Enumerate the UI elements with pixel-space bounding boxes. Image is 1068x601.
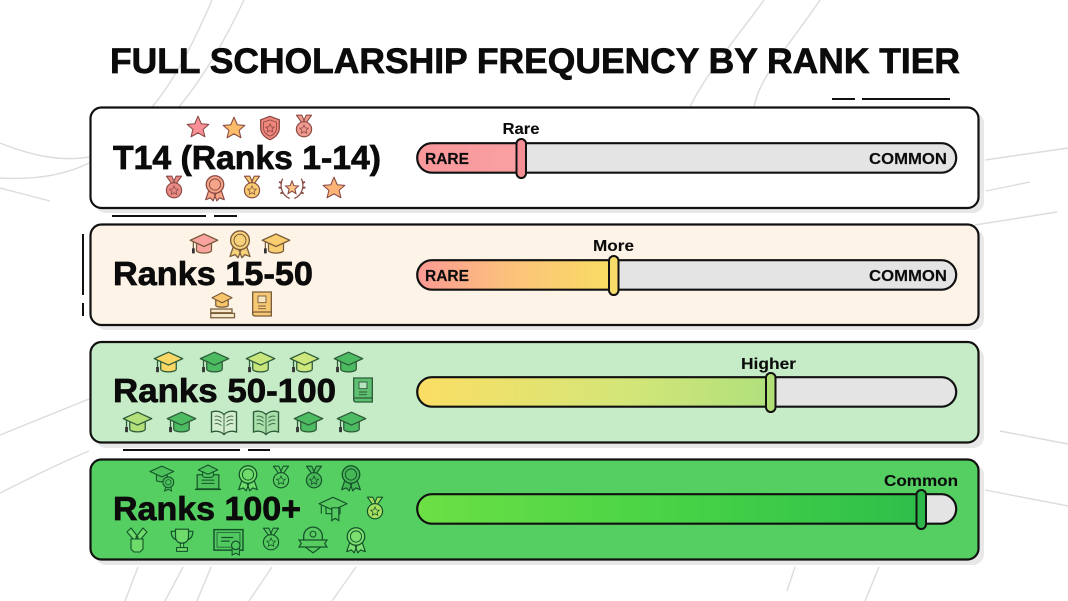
panel: Ranks 50-100 <box>90 342 984 448</box>
icons: Ranks 15-50 academics <box>190 231 290 318</box>
slider: Rare: Rare <box>502 121 540 138</box>
panel: T14 <box>90 108 984 213</box>
icons: T14 awards <box>166 115 345 201</box>
slider: More: COMMON <box>869 268 947 285</box>
panel: Ranks 15-50 <box>90 224 984 330</box>
title: FULL SCHOLARSHIP FREQUENCY BY RANK TIER <box>110 42 960 81</box>
slider: Higher: Higher <box>741 356 796 373</box>
slider: Higher <box>417 356 956 412</box>
slider: Common <box>417 473 958 529</box>
slider: More <box>417 238 956 295</box>
panel: Ranks 100+ <box>90 460 984 565</box>
heading: T14 (Ranks 1-14): T14 (Ranks 1-14) <box>113 139 381 176</box>
heading: Ranks 50-100: Ranks 50-100 <box>113 372 336 409</box>
icons: Ranks 50-100 academics <box>123 352 372 434</box>
heading: Ranks 100+: Ranks 100+ <box>113 490 301 527</box>
accent dashes <box>83 99 950 450</box>
slider: Common: Common <box>884 473 958 490</box>
slider: More: RARE <box>425 268 469 285</box>
slider: More: More <box>593 238 634 255</box>
icons: Ranks 100+ awards <box>127 465 383 555</box>
heading: Ranks 15-50: Ranks 15-50 <box>113 255 313 292</box>
slider: Rare: COMMON <box>869 151 947 168</box>
slider: Rare: RARE <box>425 151 469 168</box>
slider: Rare <box>417 121 956 178</box>
